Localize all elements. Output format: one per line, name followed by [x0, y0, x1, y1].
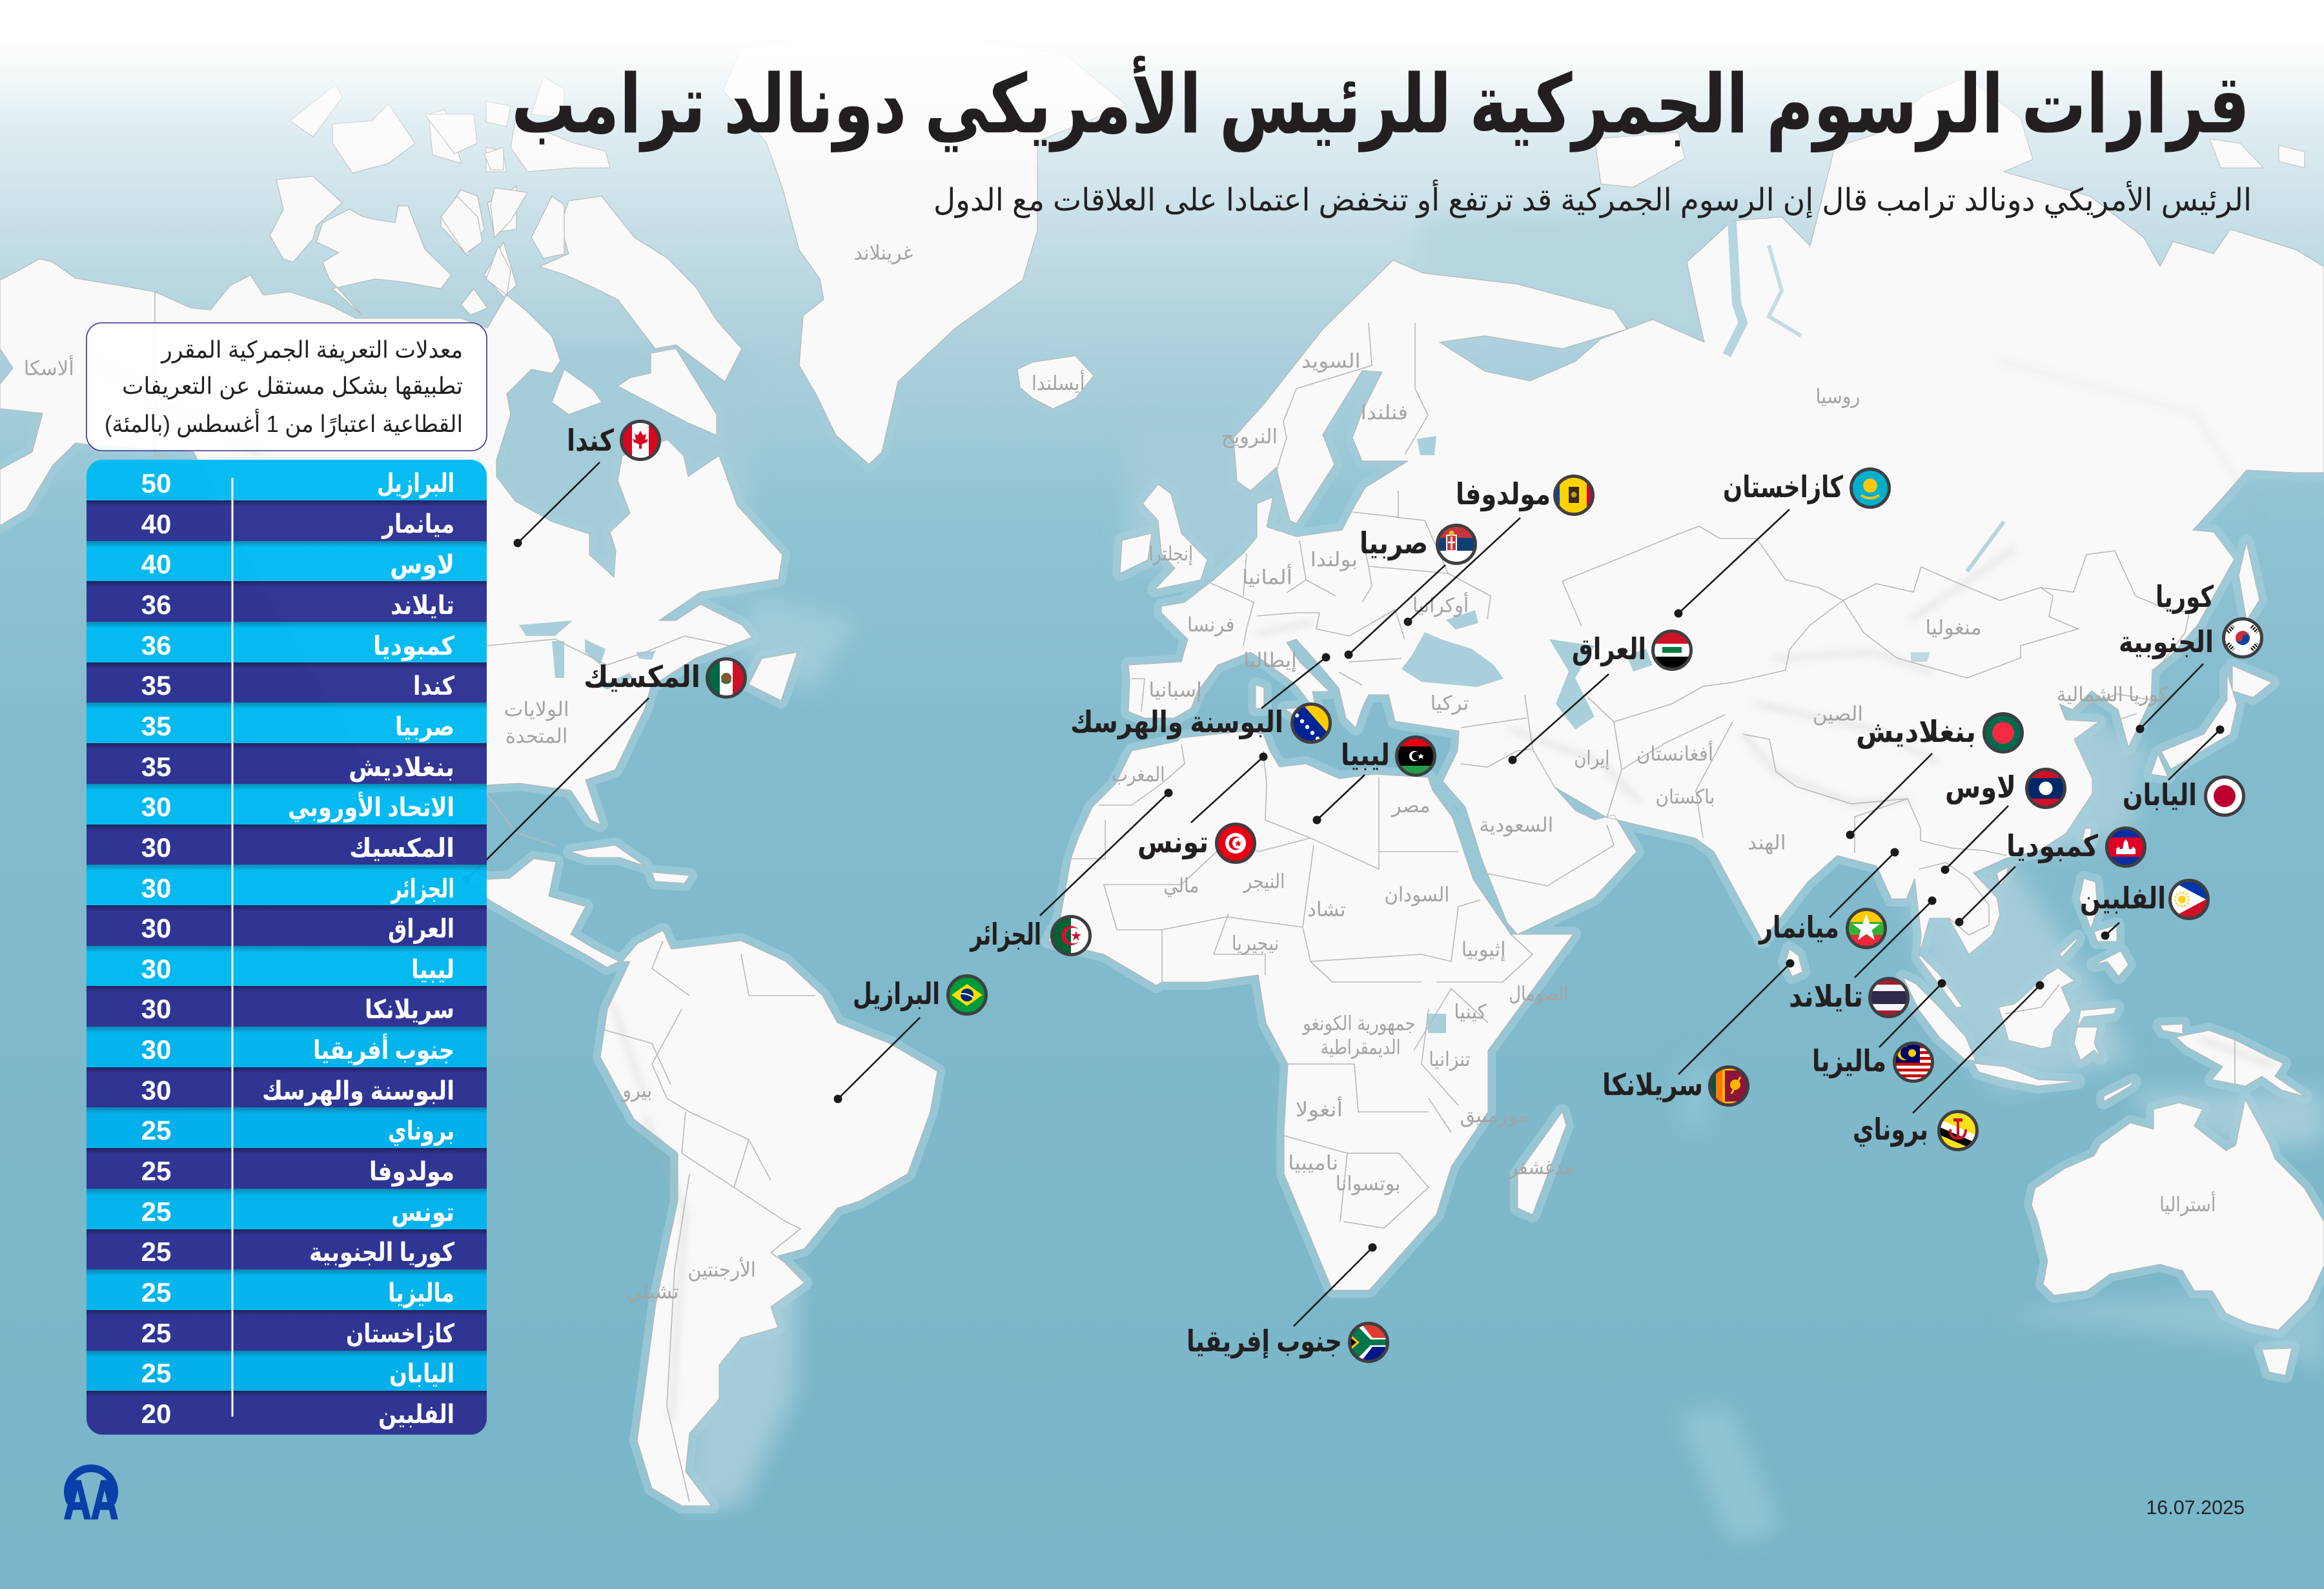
row: Bangladesh 35: [87, 743, 487, 784]
callout: Iraq: [1508, 631, 1691, 764]
row: Iraq 30: 30: [141, 913, 171, 943]
callout: South Korea: الجنوبية: [2119, 625, 2214, 659]
row: Malaysia 25: [87, 1269, 487, 1310]
callout: Myanmar: ميانمار: [1758, 910, 1839, 945]
callout: South Africa: جنوب إفريقيا: [1187, 1324, 1342, 1359]
row: Bosnia and Herzegovina 30: 30: [141, 1075, 171, 1105]
note box: القطاعية اعتبارًا من 1 أغسطس (بالمئة)‏: [105, 409, 463, 438]
row: Kazakhstan 25: 25: [141, 1318, 171, 1348]
map country name labels: الصومال: [1509, 983, 1568, 1006]
row: European Union 30: الاتحاد الأوروبي: [288, 791, 454, 823]
row: Philippines 20: الفلبين: [378, 1400, 454, 1430]
land: Greenland: [723, 26, 1126, 464]
map country name labels: السويد: [1301, 349, 1361, 373]
row: Thailand 36: [87, 581, 487, 622]
callout: Serbia: [1344, 525, 1476, 659]
map country name labels: ألمانيا: [1242, 564, 1292, 589]
map country name labels: المتحدة: [505, 724, 567, 747]
map country name labels: إيران: [1574, 747, 1609, 770]
map country name labels: أيسلندا: [1032, 370, 1085, 395]
row: Algeria 30: [87, 865, 487, 905]
country borders: [155, 292, 2235, 1502]
map country name labels: الصين: [1813, 702, 1863, 726]
callout: South Africa: [1187, 1244, 1388, 1362]
row: Bangladesh 35: بنغلاديش: [349, 753, 454, 783]
land: European and Atlantic islands: [1017, 132, 2305, 720]
row: European Union 30: 30: [141, 792, 171, 822]
row: Mexico 30: المكسيك: [349, 834, 454, 863]
row: Algeria 30: الجزائر: [391, 875, 454, 904]
map country name labels: أفغانستان: [1636, 741, 1713, 765]
callout: Sri Lanka: سريلانكا: [1602, 1068, 1703, 1102]
map country name labels: النيجر: [1243, 870, 1285, 893]
callout: Mexico: المكسيك: [584, 660, 700, 693]
map country name labels: الأرجنتين: [688, 1257, 756, 1282]
callout: Cambodia: [1955, 828, 2145, 926]
map country name labels: ألاسكا: [24, 355, 74, 380]
map country name labels: باكستان: [1656, 785, 1715, 808]
map country name labels: كوريا الشمالية: [2057, 683, 2168, 706]
map country name labels: غرينلاند: [853, 241, 913, 265]
row: Algeria 30: 30: [141, 873, 171, 903]
row: Bangladesh 35: 35: [141, 752, 171, 782]
map country name labels: أستراليا: [2159, 1191, 2216, 1216]
land: Canadian Arctic islands: [270, 77, 797, 701]
row: Kazakhstan 25: [87, 1310, 487, 1351]
row: Bosnia and Herzegovina 30: البوسنة والهرسك: [262, 1077, 454, 1106]
callout: Brunei: بروناي: [1853, 1112, 1928, 1147]
note box: تطبيقها بشكل مستقل عن التعريفات: [122, 373, 463, 400]
row: South Korea 25: كوريا الجنوبية: [309, 1238, 455, 1267]
row: Tunisia 25: [87, 1189, 487, 1229]
row: Moldova 25: 25: [141, 1156, 171, 1186]
callout: Tunisia: تونس: [1137, 825, 1208, 859]
row: Malaysia 25: 25: [141, 1277, 171, 1307]
map country name labels: جمهورية الكونغو: [1301, 1012, 1416, 1036]
terrain shading: [97, 362, 2272, 1420]
callout: Sri Lanka: [1602, 959, 1795, 1105]
row: Mexico 30: 30: [141, 832, 171, 863]
white fade at top of map: [0, 0, 2324, 194]
land: Caribbean: [571, 845, 689, 883]
row: Moldova 25: [87, 1148, 487, 1189]
row: Iraq 30: [87, 905, 487, 946]
callout: Algeria: الجزائر: [970, 918, 1041, 952]
callout: South Korea: [2119, 580, 2262, 733]
row: Serbia 35: 35: [141, 711, 171, 741]
map country name labels: أنغولا: [1296, 1096, 1343, 1122]
row: Laos 40: 40: [141, 549, 171, 579]
map country name labels: إسبانيا: [1148, 679, 1202, 702]
row: Thailand 36: تايلاند: [391, 591, 454, 620]
land: Tasmania: [2262, 1348, 2292, 1375]
callout: Iraq: العراق: [1572, 632, 1646, 666]
callout: Kazakhstan: كازاخستان: [1723, 470, 1843, 504]
callout: Philippines: الفلبين: [2080, 881, 2166, 916]
map country name labels: المغرب: [1112, 763, 1165, 786]
callout: Libya: [1313, 737, 1435, 824]
callout: Bangladesh: بنغلاديش: [1856, 715, 1976, 749]
map country name labels: تركيا: [1431, 692, 1469, 715]
row: Tunisia 25: 25: [141, 1196, 171, 1227]
row: European Union 30: [87, 784, 487, 825]
row: Myanmar 40: [87, 500, 487, 541]
map country name labels: تنزانيا: [1429, 1048, 1471, 1071]
map country name labels: الهند: [1748, 832, 1786, 855]
row: Cambodia 36: كمبوديا: [373, 632, 455, 661]
row: Brazil 50: البرازيل: [377, 469, 454, 498]
callout: Malaysia: [1812, 979, 1946, 1082]
row: Kazakhstan 25: كازاخستان: [346, 1320, 455, 1349]
row: Canada 35: كندا: [413, 672, 455, 701]
row: South Africa 30: 30: [141, 1034, 171, 1065]
map country name labels: موزمبيق: [1460, 1104, 1528, 1127]
tariff table: [87, 460, 487, 1435]
land: East and Southeast Asian islands: [1786, 542, 2305, 1102]
map country name labels: [24, 241, 2216, 1304]
map country name labels: الديمقراطية: [1321, 1036, 1401, 1059]
callout: Cambodia: كمبوديا: [2006, 829, 2098, 863]
row: Moldova 25: مولدوفا: [369, 1158, 454, 1187]
map country name labels: كينيا: [1454, 1000, 1487, 1023]
ocean shelves: [491, 207, 2324, 1543]
row: Japan 25: 25: [141, 1358, 171, 1388]
callout: Thailand: [1789, 896, 1937, 1017]
callout: Canada: كندا: [567, 424, 614, 457]
callout: Mexico: [487, 657, 747, 861]
callout: Tunisia: [1137, 753, 1268, 863]
row: Canada 35: [87, 662, 487, 703]
row: Sri Lanka 30: سريلانكا: [365, 996, 454, 1025]
map country name labels: بوتسوانا: [1336, 1173, 1401, 1196]
land: Africa: [1048, 731, 1573, 1290]
row: Laos 40: [87, 541, 487, 582]
row: Brazil 50: 50: [141, 468, 171, 498]
land: Australia: [2032, 1100, 2324, 1330]
land: North America: [0, 259, 782, 967]
row: Canada 35: 35: [141, 670, 171, 701]
map country name labels: منغوليا: [1925, 617, 1982, 640]
row: Libya 30: [87, 946, 487, 987]
callout: Moldova: مولدوفا: [1456, 477, 1551, 511]
row: Cambodia 36: [87, 622, 487, 662]
callout: Bosnia and Herzegovina: البوسنة والهرسك: [1070, 705, 1283, 739]
map country name labels: فرنسا: [1187, 613, 1235, 637]
callout: Algeria: [970, 789, 1172, 955]
callout: Laos: [1941, 769, 2065, 874]
row: Brunei 25: 25: [141, 1115, 171, 1145]
subtitle: الرئيس الأمريكي دونالد ترامب قال إن الرسوم الجمركية قد ترتفع أو تنخفض اعتمادا على العلاقات مع الدول: [933, 179, 2252, 218]
row: South Africa 30: [87, 1027, 487, 1067]
row: South Korea 25: 25: [141, 1236, 171, 1267]
map country name labels: روسيا: [1816, 385, 1860, 408]
row: Malaysia 25: ماليزيا: [388, 1279, 454, 1308]
map country name labels: فنلندا: [1361, 402, 1408, 424]
callout: Brunei: [1853, 981, 2044, 1151]
row: Myanmar 40: ميانمار: [381, 510, 454, 539]
row: Laos 40: لاوس: [390, 551, 454, 580]
callout: Canada: [514, 421, 660, 548]
row: Sri Lanka 30: 30: [141, 994, 171, 1024]
map country name labels: إنجلترا: [1148, 542, 1193, 566]
callout: Philippines: [2080, 880, 2208, 940]
row: Tunisia 25: تونس: [391, 1198, 454, 1227]
row: Myanmar 40: 40: [141, 509, 171, 539]
callout: Malaysia: ماليزيا: [1812, 1044, 1886, 1078]
row: Brunei 25: بروناي: [388, 1117, 454, 1146]
callout: Bangladesh: [1846, 714, 2022, 839]
callout: Bosnia and Herzegovina: [1070, 653, 1330, 743]
callout: Laos: لاوس: [1945, 770, 2016, 805]
land: Eurasia: [1128, 77, 2324, 1007]
row: Iraq 30: العراق: [388, 915, 454, 944]
logo: Anadolu Agency: [64, 1464, 118, 1530]
callout: Kazakhstan: [1675, 469, 1890, 617]
note box: معدلات التعريفة الجمركية المقرر: [160, 336, 463, 364]
callout: Brazil: [834, 976, 986, 1103]
map country name labels: تشيلي: [626, 1280, 679, 1304]
map country name labels: مصر: [1391, 794, 1431, 817]
callout: Libya: ليبيا: [1341, 738, 1390, 772]
map country name labels: بولندا: [1310, 548, 1358, 571]
row: Brazil 50: [87, 460, 487, 500]
note box: [87, 323, 487, 451]
row: Cambodia 36: 36: [141, 630, 171, 661]
logo: Anadolu Agency: AA: [64, 1470, 118, 1530]
map country name labels: السعودية: [1479, 814, 1553, 837]
row: Philippines 20: [87, 1391, 487, 1435]
callout: Serbia: صربيا: [1360, 526, 1428, 560]
map country name labels: بيرو: [621, 1079, 652, 1102]
map country name labels: ناميبيا: [1288, 1151, 1338, 1174]
row: Japan 25: [87, 1351, 487, 1391]
date: 16.07.2025: [2146, 1497, 2245, 1519]
row: Sri Lanka 30: [87, 986, 487, 1027]
map country name labels: إثيوبيا: [1462, 938, 1506, 961]
row: Libya 30: 30: [141, 954, 171, 984]
coastal shallow halo: [0, 487, 2324, 1513]
map country name labels: النرويج: [1221, 425, 1278, 448]
callout: Thailand: تايلاند: [1789, 979, 1863, 1013]
callout: Brazil: البرازيل: [853, 977, 940, 1011]
row: South Africa 30: جنوب أفريقيا: [313, 1033, 454, 1065]
row: Bosnia and Herzegovina 30: [87, 1067, 487, 1108]
land: South America: [600, 930, 937, 1506]
callout: Japan: اليابان: [2123, 778, 2197, 812]
inland seas and lakes: [519, 221, 2004, 1033]
row: Mexico 30: [87, 825, 487, 865]
land: Madagascar: [1518, 1112, 1566, 1215]
map country name labels: أوكرانيا: [1412, 592, 1469, 617]
table column divider: [231, 478, 234, 1417]
callout: South Korea: كوريا: [2156, 580, 2214, 614]
row: Libya 30: ليبيا: [411, 956, 454, 984]
map country name labels: مالي: [1163, 874, 1199, 897]
callout: Japan: [2123, 726, 2244, 815]
row: South Korea 25: [87, 1229, 487, 1270]
row: Thailand 36: 36: [141, 589, 171, 620]
map country name labels: مدغشقر: [1507, 1156, 1574, 1179]
callout: Moldova: [1403, 476, 1593, 626]
callout: Myanmar: [1758, 848, 1899, 948]
row: Philippines 20: 20: [141, 1399, 171, 1429]
row: Serbia 35: صربيا: [395, 713, 454, 742]
map country name labels: تشاد: [1307, 898, 1346, 921]
map country name labels: السودان: [1384, 883, 1449, 907]
row: Japan 25: اليابان: [389, 1360, 454, 1388]
map country name labels: نيجيريا: [1232, 932, 1279, 956]
map country name labels: إيطاليا: [1243, 649, 1297, 672]
row: Brunei 25: [87, 1107, 487, 1148]
map country name labels: الولايات: [504, 698, 569, 721]
row: Serbia 35: [87, 702, 487, 743]
